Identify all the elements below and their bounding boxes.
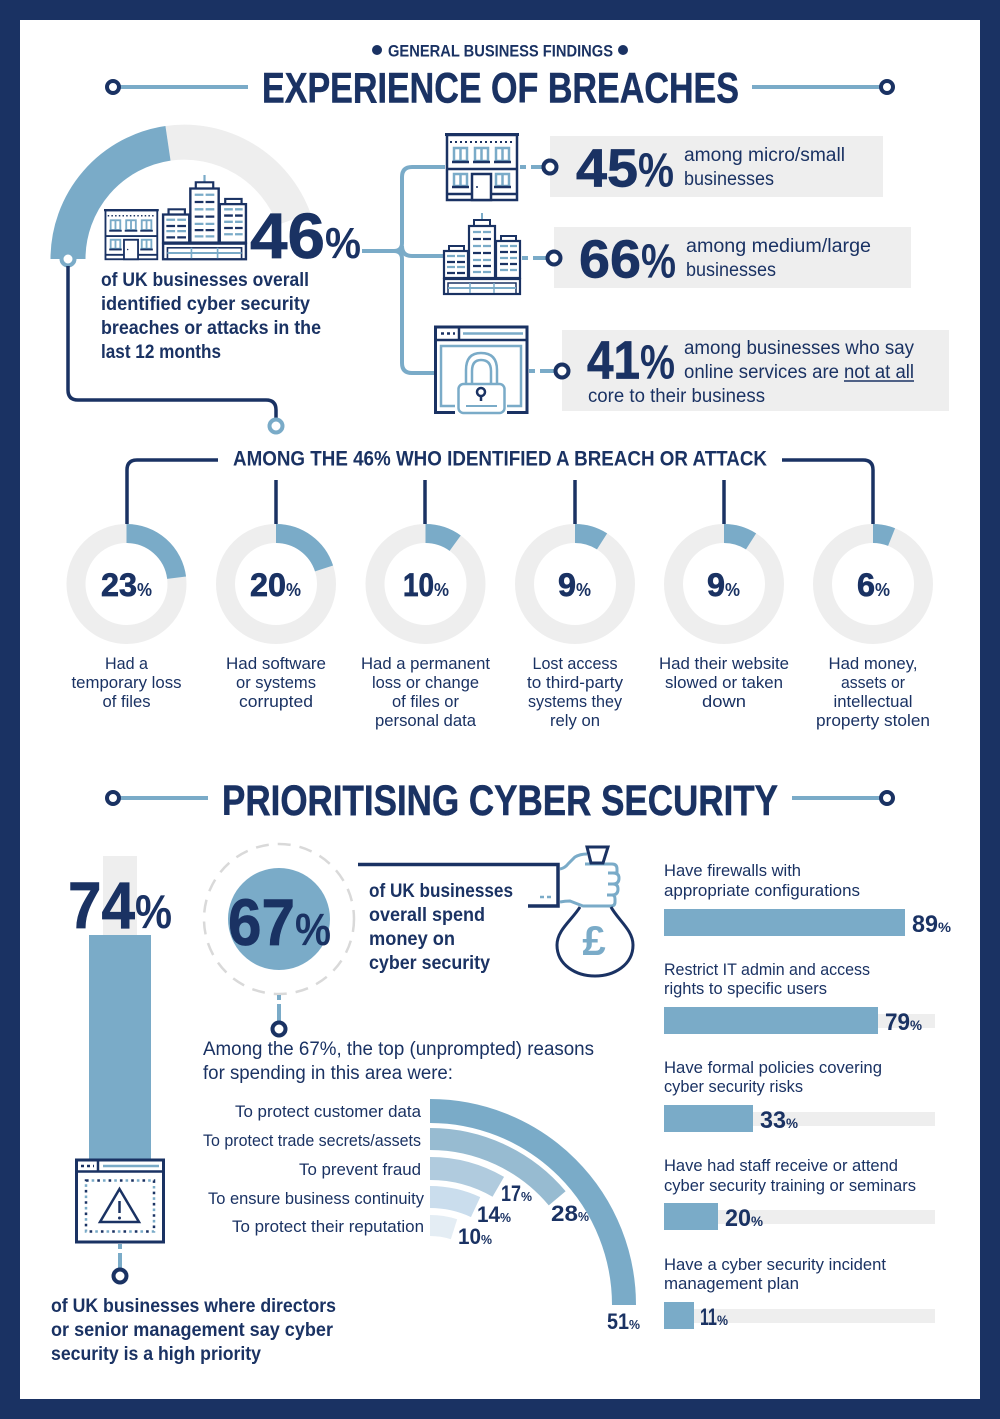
- radial bar chart: top reasons for spending: [203, 1103, 640, 1334]
- bar: admin rights 79%: %: [910, 1017, 923, 1033]
- text: reasons intro: [203, 1039, 594, 1084]
- connector: gauge to subsection heading: [68, 266, 276, 420]
- bar: formal policies 33%: 33: [760, 1107, 786, 1134]
- bar: staff training 20%: %: [751, 1213, 764, 1229]
- connector: city to panel: [522, 256, 548, 260]
- text: 67% description: cyber security: [369, 953, 490, 974]
- donut: 10% permanent loss: 10: [403, 567, 434, 603]
- panel: online services: [556, 330, 949, 411]
- text: 67% description: overall spend: [369, 905, 485, 926]
- heading: among the 46%: AMONG THE 46% WHO IDENTIFIED A BREACH OR ATTACK: [233, 448, 767, 470]
- bar: incident plan 11%: [664, 1256, 935, 1331]
- arc: customer data 51%: [430, 1111, 624, 1305]
- values: reasons: 51: [607, 1309, 629, 1334]
- labels: reasons: [203, 1103, 425, 1236]
- donut: 20% software corrupted: Had software: [226, 655, 326, 673]
- icon: hand holding money bag: [358, 847, 633, 976]
- stat: 46%: [250, 200, 361, 272]
- donut: 9% website slowed: slowed or taken: [665, 674, 783, 692]
- text: 74% description: security is a high priority: [51, 1344, 261, 1365]
- donut: 6% money stolen: intellectual: [834, 693, 912, 711]
- values: reasons: %: [629, 1317, 640, 1332]
- connector: 67% to reasons: [272, 995, 286, 1036]
- donut: 6% money stolen: [816, 534, 930, 730]
- panel: micro/small: %: [638, 144, 674, 198]
- values: reasons: 14: [477, 1202, 501, 1227]
- labels: reasons: To protect customer data: [235, 1103, 422, 1121]
- bar: staff training 20%: cyber security training or seminars: [664, 1177, 916, 1195]
- values: reasons: %: [500, 1210, 511, 1225]
- donut: 23% temporary loss of files: Had a: [105, 655, 149, 673]
- title: prioritising cyber security: PRIORITISING CYBER SECURITY: [222, 777, 778, 825]
- panel: medium/large: 66: [579, 230, 641, 290]
- values: reasons: 17: [501, 1181, 521, 1206]
- bar: staff training 20%: Have had staff receive or attend: [664, 1157, 898, 1175]
- panel: medium/large: %: [641, 236, 676, 288]
- panel: online services: core to their business: [588, 386, 765, 407]
- donut: 20% software corrupted: %: [286, 580, 301, 600]
- donut: 9% third-party access: rely on: [550, 712, 600, 730]
- bar: incident plan 11%: %: [717, 1312, 728, 1328]
- panel: medium/large: among medium/large: [686, 236, 871, 257]
- connector tree: to three breakdowns: [362, 167, 445, 373]
- arc: trade secrets 28%: [430, 1139, 557, 1198]
- text: reasons intro: for spending in this area were:: [203, 1063, 453, 1084]
- icon: city towers: [163, 175, 246, 259]
- bar: formal policies 33%: %: [786, 1115, 799, 1131]
- donut: 23% temporary loss of files: 23: [101, 567, 137, 603]
- title: experience of breaches: EXPERIENCE OF BREACHES: [262, 64, 739, 112]
- bar: incident plan 11%: management plan: [664, 1275, 799, 1293]
- donut: 9% website slowed: down: [702, 693, 746, 711]
- bar: incident plan 11%: Have a cyber security incident: [664, 1256, 886, 1274]
- icon: browser warning: [76, 1160, 164, 1242]
- stat: 67% circle: %: [295, 904, 331, 955]
- panel: micro/small: 45: [576, 138, 638, 198]
- bar: firewalls 89%: %: [938, 919, 952, 935]
- donut: 9% website slowed: [659, 534, 789, 711]
- donut: 9% website slowed: %: [725, 580, 740, 600]
- bar: firewalls 89%: 89: [912, 911, 938, 938]
- donut: 10% permanent loss: Had a permanent: [361, 655, 490, 673]
- bar: firewalls 89%: appropriate configurations: [664, 882, 860, 900]
- arc: reputation 10%: [430, 1226, 454, 1229]
- text: 46% description: of UK businesses overall: [101, 270, 309, 291]
- values: reasons: [458, 1181, 640, 1334]
- text: 67% description: money on: [369, 929, 455, 950]
- connector: browser to panel: [529, 369, 556, 373]
- arc: business continuity 14%: [430, 1197, 476, 1207]
- bar: admin rights 79%: Restrict IT admin and access: [664, 961, 870, 979]
- donut: 23% temporary loss of files: temporary loss: [72, 674, 182, 692]
- labels: reasons: To protect trade secrets/assets: [203, 1132, 421, 1150]
- panel: online services: not at all: [844, 362, 914, 383]
- text: 46% description: breaches or attacks in the: [101, 318, 321, 339]
- panel: micro/small: [544, 136, 883, 198]
- panel: online services: among businesses who say: [684, 338, 914, 359]
- text: 74% description: or senior management say cyber: [51, 1320, 334, 1341]
- donut: 9% website slowed: 9: [707, 567, 725, 603]
- labels: reasons: To prevent fraud: [299, 1161, 421, 1179]
- column chart: 74% directors priority: 74: [68, 868, 135, 942]
- values: reasons: %: [481, 1232, 492, 1247]
- node: connector end: [270, 420, 282, 432]
- donut: 9% website slowed: Had their website: [659, 655, 789, 673]
- text: 46% description: last 12 months: [101, 342, 221, 363]
- donut: 9% third-party access: [524, 534, 626, 730]
- labels: reasons: To ensure business continuity: [208, 1190, 425, 1208]
- bar: formal policies 33%: cyber security risks: [664, 1078, 803, 1096]
- icon: hand holding money bag: £: [582, 917, 606, 964]
- donut: 9% third-party access: to third-party: [527, 674, 624, 692]
- donut: 6% money stolen: 6: [857, 567, 875, 603]
- donut: 23% temporary loss of files: %: [137, 580, 152, 600]
- donut: 6% money stolen: property stolen: [816, 712, 930, 730]
- bar: firewalls 89%: Have firewalls with: [664, 862, 801, 880]
- gauge: 46% of UK businesses: [62, 142, 294, 266]
- text: reasons intro: Among the 67%, the top (unprompted) reasons: [203, 1039, 594, 1060]
- values: reasons: 10: [458, 1224, 481, 1249]
- donut: 10% permanent loss: of files or: [392, 693, 459, 711]
- donut: 9% third-party access: %: [576, 580, 591, 600]
- bar: incident plan 11%: 11: [700, 1304, 717, 1331]
- stat: 67% circle: 67: [228, 885, 295, 959]
- icon: office breakdown: [445, 133, 519, 200]
- donut: 23% temporary loss of files: [72, 534, 182, 711]
- section label: general business findings: GENERAL BUSINESS FINDINGS: [388, 42, 613, 60]
- donut: 20% software corrupted: 20: [250, 567, 286, 603]
- stat: 46%: 46: [250, 200, 325, 272]
- column chart: 74% directors priority: [68, 856, 172, 1161]
- panel: micro/small: among micro/small: [684, 145, 845, 166]
- panel: online services: %: [640, 336, 675, 390]
- bar: admin rights 79%: [664, 961, 935, 1036]
- arc: prevent fraud 17%: [430, 1168, 498, 1187]
- donut: 9% third-party access: Lost access: [532, 655, 618, 673]
- values: reasons: 28: [551, 1201, 578, 1226]
- connector: warning to caption: [114, 1244, 126, 1282]
- text: 67% description: [369, 881, 513, 974]
- bar: admin rights 79%: rights to specific users: [664, 980, 827, 998]
- donut: 9% third-party access: 9: [558, 567, 576, 603]
- icon: browser with padlock: [436, 327, 527, 413]
- donut: 10% permanent loss: personal data: [375, 712, 477, 730]
- text: 74% description: of UK businesses where directors: [51, 1296, 336, 1317]
- bar: admin rights 79%: 79: [885, 1009, 910, 1036]
- text: 74% description: [51, 1296, 336, 1365]
- bar: staff training 20%: [664, 1157, 935, 1232]
- panel: online services: online services are: [684, 362, 839, 383]
- bar: formal policies 33%: Have formal policies covering: [664, 1059, 882, 1077]
- bar: firewalls 89%: [664, 862, 952, 938]
- column chart: 74% directors priority: %: [135, 885, 172, 938]
- donut: 6% money stolen: Had money,: [828, 655, 918, 673]
- donut: 10% permanent loss: loss or change: [372, 674, 479, 692]
- text: 67% description: of UK businesses: [369, 881, 513, 902]
- donut: 6% money stolen: assets or: [841, 674, 905, 692]
- donut: 20% software corrupted: or systems: [236, 674, 316, 692]
- donut: 9% third-party access: systems they: [528, 693, 623, 711]
- donut: 10% permanent loss: %: [434, 580, 449, 600]
- panel: micro/small: businesses: [684, 169, 774, 190]
- values: reasons: %: [521, 1189, 532, 1204]
- panel: online services: 41: [587, 330, 640, 390]
- stat: 67% circle: [204, 844, 354, 994]
- donut: 20% software corrupted: corrupted: [239, 693, 313, 711]
- panel: medium/large: businesses: [686, 260, 776, 281]
- text: 46% description: [101, 270, 321, 363]
- bar: formal policies 33%: [664, 1059, 935, 1134]
- icon: city breakdown: [444, 213, 520, 294]
- labels: reasons: To protect their reputation: [232, 1218, 424, 1236]
- panel: medium/large: [548, 227, 911, 290]
- donut: 10% permanent loss: [361, 534, 490, 730]
- icon: small office: [104, 209, 159, 259]
- donut: 23% temporary loss of files: of files: [102, 693, 150, 711]
- donut: 20% software corrupted: [226, 534, 326, 711]
- values: reasons: %: [578, 1209, 589, 1224]
- stat: 46%: %: [325, 219, 361, 268]
- connector: office to panel: [520, 160, 556, 174]
- donut: 6% money stolen: %: [875, 580, 890, 600]
- connector lines to donuts: [127, 460, 873, 524]
- bar: staff training 20%: 20: [725, 1205, 751, 1232]
- text: 46% description: identified cyber security: [101, 294, 310, 315]
